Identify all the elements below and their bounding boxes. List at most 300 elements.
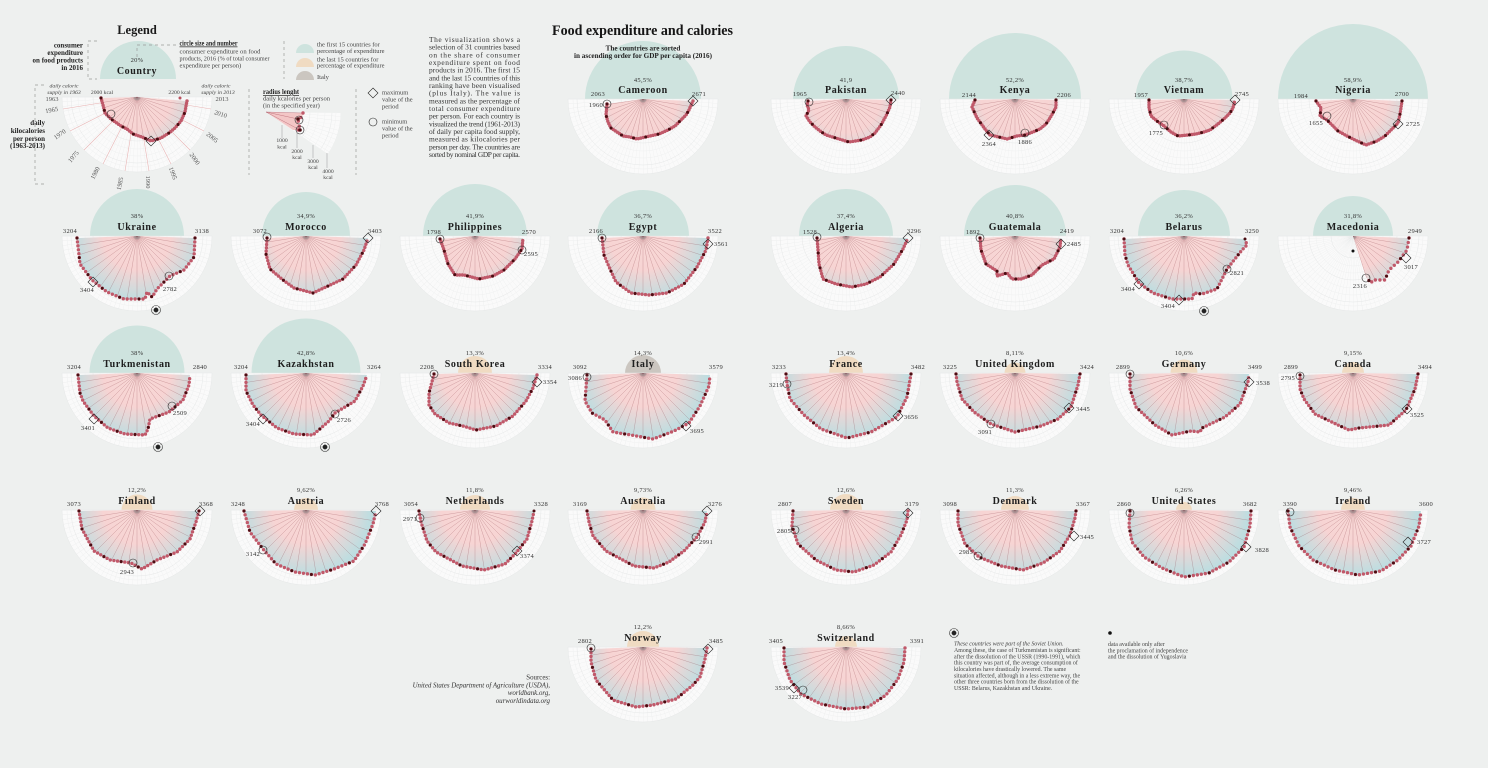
- legend: radius scale: 2000: [291, 149, 303, 155]
- markers: [1126, 509, 1251, 552]
- values: 2700: [1395, 91, 1409, 98]
- legend: max and min markers: value of the: [382, 126, 413, 132]
- legend: colour key: percentage of expenditure: [317, 48, 385, 55]
- legend: year scale: 1963: [46, 96, 58, 103]
- values: 3092: [573, 364, 587, 371]
- legend: max and min markers: [368, 88, 413, 140]
- trend: [804, 98, 893, 144]
- name: Cameroon: [618, 85, 668, 96]
- name: Pakistan: [825, 85, 867, 96]
- dome: [949, 33, 1081, 99]
- values: 2485: [1067, 241, 1081, 248]
- markers: [430, 370, 542, 387]
- markers: [813, 233, 913, 243]
- legend: dashed bracket top: [88, 41, 97, 79]
- trend: [600, 236, 710, 297]
- percent: 12,6%: [837, 487, 855, 494]
- legend: example percentage: 20%: [131, 57, 144, 64]
- values: [1283, 501, 1433, 546]
- legend: daily kilocalories label: per person: [13, 135, 45, 143]
- name: Kenya: [1000, 85, 1030, 96]
- markers: [587, 644, 713, 654]
- values: 3579: [709, 364, 723, 371]
- legend: caloric supply notes: 2000 kcal: [91, 90, 114, 96]
- panel: legend: [10, 22, 413, 191]
- name: Norway: [624, 633, 662, 644]
- chart: Guatemala: [940, 185, 1090, 310]
- values: 3248: [231, 501, 245, 508]
- values: 3098: [943, 501, 957, 508]
- name: South Korea: [445, 359, 505, 370]
- values: 3368: [199, 501, 213, 508]
- values: 3054: [404, 501, 419, 508]
- grid: [1278, 510, 1428, 585]
- grid: [940, 99, 1090, 174]
- legend: radius note: (in the specified year): [263, 102, 320, 110]
- grid: [1109, 99, 1259, 174]
- legend: colour key: the last 15 countries for: [317, 56, 379, 64]
- values: 2821: [1230, 270, 1244, 277]
- chart: Algeria: [772, 189, 921, 310]
- dome: [1278, 24, 1428, 99]
- values: 3138: [195, 228, 209, 235]
- values: 3374: [520, 553, 535, 560]
- dome: [122, 494, 152, 510]
- values: 1984: [1294, 93, 1309, 100]
- markers: [1160, 95, 1240, 129]
- values: [1134, 91, 1249, 137]
- legend heading: Legend: [117, 23, 157, 37]
- legend: radius wedge: [266, 111, 340, 154]
- chart: Ukraine: [62, 189, 212, 315]
- values: [769, 638, 924, 701]
- percent: 52,2%: [1006, 77, 1024, 84]
- values: [589, 91, 706, 109]
- trend: [604, 99, 695, 140]
- values: [943, 364, 1095, 436]
- text block: introduction: sorted by nominal GDP per capita.: [429, 150, 520, 159]
- markers: [1323, 112, 1403, 129]
- markers: [583, 373, 691, 431]
- trend: [400, 435, 550, 585]
- markers: [603, 96, 698, 108]
- legend: radius scale: kcal: [277, 144, 287, 150]
- legend: caloric supply notes: supply in 2013: [201, 90, 235, 96]
- percent: 40,8%: [1006, 213, 1024, 220]
- legend: colour key: the first 15 countries for: [317, 42, 381, 48]
- chart: Ireland: [1278, 435, 1433, 585]
- text block: introduction: on the share of consumer: [429, 50, 521, 59]
- chart: Sweden: [771, 435, 921, 585]
- percent: 36,7%: [634, 213, 652, 220]
- name: Ukraine: [117, 222, 157, 233]
- values: [1116, 364, 1270, 387]
- name: United States: [1152, 496, 1216, 507]
- markers: [783, 380, 903, 421]
- grid: [1109, 236, 1259, 311]
- percent: 8,66%: [837, 624, 855, 631]
- percent: 42,8%: [297, 350, 315, 357]
- values: [803, 228, 922, 236]
- values: 3354: [543, 379, 558, 386]
- values: 3017: [1404, 264, 1419, 271]
- values: 3225: [943, 364, 957, 371]
- values: 2726: [337, 417, 352, 424]
- values: 2860: [1117, 501, 1131, 508]
- name: Nigeria: [1335, 85, 1371, 96]
- values: 2166: [589, 228, 604, 235]
- grid: [568, 373, 718, 448]
- markers: [598, 234, 713, 249]
- values: 3445: [1076, 406, 1090, 413]
- values: [1110, 228, 1259, 310]
- grid: [940, 373, 1090, 448]
- values: 2899: [1116, 364, 1130, 371]
- values: 1655: [1309, 120, 1323, 127]
- markers: [1296, 372, 1412, 414]
- values: [962, 92, 1072, 148]
- values: 3204: [1110, 228, 1125, 235]
- values: 3494: [1418, 364, 1433, 371]
- values: [1353, 228, 1422, 290]
- trend: [1122, 236, 1248, 301]
- legend: circle size note: [180, 40, 270, 70]
- legend: caloric supply notes: daily caloric: [50, 84, 79, 90]
- values: 3276: [708, 501, 723, 508]
- percent: 8,11%: [1006, 350, 1024, 357]
- values: 1892: [966, 229, 980, 236]
- chart: Italy: [568, 351, 722, 448]
- values: 2364: [982, 141, 997, 148]
- grid: [1278, 99, 1428, 174]
- chart: Vietnam: [1110, 50, 1258, 174]
- markers: [791, 508, 913, 534]
- grid: [1278, 236, 1428, 311]
- values: 3539: [775, 685, 789, 692]
- percent: 38%: [131, 350, 144, 357]
- values: 1775: [1149, 130, 1163, 137]
- text block: sources: United States Department of Agriculture (USDA),: [413, 682, 550, 690]
- chart: Canada: [1278, 298, 1433, 448]
- grid: [1109, 373, 1259, 448]
- chart: United States: [1109, 435, 1269, 585]
- values: 3401: [81, 425, 95, 432]
- markers: [258, 410, 339, 452]
- legend: year scale: 1980: [90, 166, 102, 181]
- values: [253, 228, 382, 235]
- markers: [976, 234, 1066, 249]
- values: 3391: [910, 638, 924, 645]
- chart: Germany: [1109, 298, 1270, 448]
- values: [67, 501, 213, 576]
- legend: max and min markers: period: [382, 104, 399, 110]
- values: 2595: [524, 251, 538, 258]
- values: 2807: [778, 501, 793, 508]
- legend: radius note: daily kcalories per person: [263, 96, 331, 102]
- text block: soviet union note: kilocalories have drastically lowered. The same: [954, 667, 1066, 673]
- values: 2671: [692, 91, 706, 98]
- values: 3086: [568, 375, 583, 382]
- text block: introduction: (plus Italy). The value is: [429, 89, 520, 98]
- trend: [427, 372, 539, 432]
- name: Finland: [118, 496, 156, 507]
- legend: caloric supply notes: [47, 84, 235, 96]
- legend: year scale: [45, 96, 229, 191]
- icon: soviet union marker: [950, 628, 958, 638]
- dome: [1001, 496, 1029, 510]
- values: 3561: [714, 241, 728, 248]
- dome: [423, 184, 527, 236]
- legend: caloric supply notes: daily caloric: [202, 84, 231, 90]
- values: [1294, 91, 1420, 128]
- legend: radius scale: kcal: [292, 155, 302, 161]
- chart: Switzerland: [769, 572, 924, 722]
- grid: [568, 236, 718, 311]
- text block: introduction: person per day. The countries are: [429, 142, 521, 151]
- percent: 14,3%: [634, 350, 652, 357]
- values: 3296: [907, 228, 922, 235]
- trend: [62, 435, 212, 585]
- values: 3169: [573, 501, 587, 508]
- grid: [771, 510, 921, 585]
- grid: [400, 373, 550, 448]
- text block: introduction: expenditure spent on food: [429, 58, 520, 67]
- values: 2725: [1406, 121, 1420, 128]
- values: 2971: [403, 516, 417, 523]
- chart: Austria: [231, 435, 389, 585]
- chart: Nigeria: [1278, 24, 1428, 174]
- dome: [625, 355, 661, 373]
- percent: 11,8%: [466, 487, 484, 494]
- values: 3424: [1080, 364, 1095, 371]
- legend: radius scale: 1000: [276, 138, 288, 144]
- dome: [1004, 362, 1026, 373]
- subtitle: in ascending order for GDP per capita (2016): [574, 52, 713, 60]
- grid: [771, 99, 921, 174]
- grid: [62, 373, 212, 448]
- values: 1528: [803, 229, 817, 236]
- text block: data availability note: [1108, 641, 1188, 660]
- percent: 31,8%: [1344, 213, 1362, 220]
- text block: sources: ourworldindata.org: [496, 698, 551, 705]
- markers: [1126, 370, 1254, 387]
- legend: circle size note: products, 2016 (% of total consumer: [180, 56, 270, 62]
- dome: [627, 631, 659, 647]
- values: 3390: [1283, 501, 1297, 508]
- markers: [1352, 250, 1411, 282]
- values: 2419: [1060, 228, 1074, 235]
- grid: [400, 236, 550, 311]
- name: Turkmenistan: [103, 359, 171, 370]
- chart: Belarus: [1110, 190, 1258, 316]
- dome: [964, 185, 1066, 236]
- chart: Philippines: [400, 184, 550, 310]
- legend: year scale: 2010: [213, 109, 228, 120]
- legend: radius note: radius lenght: [263, 88, 300, 96]
- trend: [568, 435, 718, 585]
- legend: year scale: 1975: [67, 150, 81, 164]
- dome: [597, 190, 689, 236]
- percent: 9,15%: [1344, 350, 1362, 357]
- text block: introduction: of daily per capita food supply,: [429, 127, 520, 136]
- name: Vietnam: [1164, 85, 1204, 96]
- values: 3072: [253, 228, 267, 235]
- trend: [264, 236, 369, 295]
- name: Sweden: [828, 496, 864, 507]
- dome: [799, 189, 893, 236]
- grid: [231, 510, 381, 585]
- chart: Kenya: [940, 24, 1090, 174]
- dome: [1342, 362, 1364, 373]
- name: Switzerland: [817, 633, 875, 644]
- text block: data availability note: data available only after: [1108, 641, 1165, 648]
- legend: consumer expenditure label: [33, 42, 83, 72]
- legend: radius scale: 4000: [322, 169, 334, 175]
- text block: data availability note: the proclamation of independence: [1108, 648, 1188, 654]
- chart: Denmark: [940, 435, 1094, 585]
- values: 2840: [193, 364, 207, 371]
- markers: [259, 506, 381, 554]
- values: 3682: [1243, 501, 1257, 508]
- values: 2440: [891, 90, 905, 97]
- markers: [805, 95, 896, 106]
- text block: introduction: measured as the percentage of: [429, 96, 521, 105]
- legend: caloric supply notes: 2200 kcal: [168, 90, 191, 96]
- percent: 6,26%: [1175, 487, 1193, 494]
- icon: data availability dot: [1108, 631, 1112, 635]
- percent: 9,73%: [634, 487, 652, 494]
- grid: [231, 373, 381, 448]
- values: 1960: [589, 102, 603, 109]
- dome: [1176, 502, 1192, 510]
- text block: introduction: total consumer expenditure: [429, 104, 521, 113]
- legend: consumer expenditure label: on food products: [33, 56, 83, 64]
- chart: Turkmenistan: [62, 326, 212, 452]
- grid: [940, 236, 1090, 311]
- values: 1886: [1018, 139, 1033, 146]
- name: Ireland: [1335, 496, 1371, 507]
- text block: data availability note: and the dissolution of Yugoslavia: [1108, 654, 1187, 660]
- markers: [789, 683, 807, 694]
- legend: max and min markers: value of the: [382, 96, 413, 104]
- percent: 41,9: [840, 77, 852, 84]
- legend: daily kilocalories label: [10, 119, 46, 150]
- grid: [568, 647, 718, 722]
- markers: [984, 129, 1029, 140]
- chart: Pakistan: [772, 46, 920, 174]
- legend: year scale: 1970: [53, 128, 67, 141]
- dome: [829, 356, 863, 373]
- values: 3404: [1161, 303, 1176, 310]
- values: 3264: [367, 364, 382, 371]
- markers: [129, 506, 205, 567]
- values: 3204: [63, 228, 78, 235]
- percent: 13,4%: [837, 350, 855, 357]
- percent: 12,2%: [128, 487, 146, 494]
- text block: introduction: selection of 31 countries based: [429, 43, 520, 52]
- values: 3204: [234, 364, 249, 371]
- markers: [416, 514, 522, 556]
- markers: [88, 272, 173, 314]
- percent: 9,46%: [1344, 487, 1362, 494]
- grid: [771, 236, 921, 311]
- values: 3727: [1417, 539, 1432, 546]
- legend: dashed bracket left: [35, 85, 44, 184]
- name: Belarus: [1166, 222, 1202, 233]
- values: 3233: [772, 364, 786, 371]
- grid: [231, 236, 381, 311]
- name: Australia: [620, 496, 666, 507]
- values: [777, 501, 919, 535]
- values: 3404: [80, 287, 95, 294]
- name: Netherlands: [446, 496, 504, 507]
- dome: [90, 189, 184, 236]
- trend: [1109, 298, 1259, 448]
- values: 3179: [905, 501, 919, 508]
- dome: [835, 636, 857, 647]
- values: [1281, 364, 1433, 419]
- values: 3485: [709, 638, 723, 645]
- legend: circle size note: consumer expenditure on food: [180, 48, 261, 56]
- values: 2991: [699, 539, 713, 546]
- percent: 36,2%: [1175, 213, 1193, 220]
- dome: [1136, 51, 1232, 99]
- name: Egypt: [629, 222, 657, 233]
- legend: max and min markers: period: [382, 132, 399, 140]
- name: United Kingdom: [975, 359, 1055, 370]
- text block: introduction: [429, 35, 521, 159]
- chart: Netherlands: [400, 435, 550, 585]
- legend: year scale: 1990: [144, 176, 151, 188]
- trend: [1314, 99, 1404, 146]
- values: [403, 501, 548, 560]
- values: 2208: [420, 364, 434, 371]
- values: 2316: [1353, 283, 1368, 290]
- legend: max and min markers: maximum: [382, 90, 408, 96]
- values: [793, 90, 905, 98]
- legend: circle size note: circle size and number: [180, 40, 238, 48]
- legend: example country: Country: [117, 66, 157, 77]
- trend: [771, 572, 921, 722]
- values: 3328: [534, 501, 548, 508]
- name: Kazakhstan: [277, 359, 335, 370]
- values: [589, 228, 728, 248]
- values: [578, 638, 723, 645]
- trend: [244, 373, 368, 437]
- chart: Cameroon: [568, 41, 718, 174]
- values: 3538: [1256, 380, 1270, 387]
- chart: South Korea: [400, 351, 557, 448]
- markers: [1286, 508, 1413, 547]
- grid: [400, 510, 550, 585]
- markers: [987, 403, 1074, 428]
- trend: [438, 236, 524, 280]
- legend: year scale: 2005: [205, 131, 219, 145]
- values: [769, 364, 925, 421]
- text block: soviet union note: [954, 640, 1081, 692]
- legend: radius scale: [276, 125, 334, 181]
- text block: sources: [413, 674, 551, 705]
- trend: [815, 236, 908, 289]
- text block: introduction: ranking have been visualised: [429, 81, 520, 90]
- values: 2802: [578, 638, 592, 645]
- markers: [974, 531, 1079, 560]
- dome: [1138, 190, 1230, 236]
- values: [427, 229, 538, 258]
- name: Algeria: [828, 222, 864, 233]
- grid: [1278, 373, 1428, 448]
- values: 3656: [904, 414, 919, 421]
